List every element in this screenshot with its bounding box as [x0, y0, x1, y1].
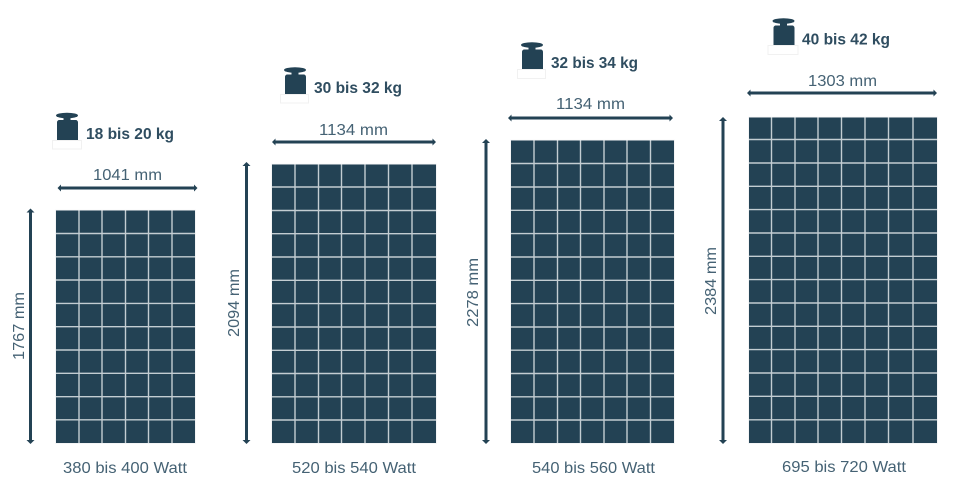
width label: 1303 mm [808, 73, 877, 90]
arrow: width [58, 184, 198, 192]
power label: 520 bis 540 Watt [292, 460, 417, 477]
power label: 380 bis 400 Watt [63, 460, 188, 477]
solar panel 6x10 [56, 210, 195, 443]
height label: 2384 mm [703, 247, 720, 315]
height label: 2094 mm [226, 269, 243, 337]
arrow: width [508, 114, 673, 122]
icon: weight 30 kg [280, 67, 308, 103]
module group: 540 bis 560 Watt [465, 42, 674, 477]
power label: 695 bis 720 Watt [782, 459, 907, 476]
solar panel 7x12 [272, 164, 436, 443]
arrow: width [272, 138, 436, 146]
height label: 2278 mm [465, 258, 482, 327]
width label: 1134 mm [319, 122, 388, 139]
height label: 1767 mm [11, 292, 28, 360]
weight label: 18 bis 20 kg [86, 126, 174, 143]
solar panel 7x13 [511, 140, 674, 443]
icon: weight 40 kg [768, 18, 798, 54]
arrow: width [747, 90, 937, 96]
arrow: height [719, 117, 727, 444]
width label: 1134 mm [556, 96, 625, 113]
icon: weight 18 kg [52, 113, 82, 149]
module group: 380 bis 400 Watt [11, 113, 198, 477]
power label: 540 bis 560 Watt [532, 460, 656, 477]
solar panel 8x14 [749, 118, 937, 443]
weight label: 30 bis 32 kg [314, 80, 402, 97]
module group: 520 bis 540 Watt [226, 67, 436, 477]
icon: weight 32 kg [518, 42, 546, 78]
arrow: height [482, 139, 490, 444]
width label: 1041 mm [93, 167, 162, 184]
arrow: height [242, 162, 250, 444]
weight label: 32 bis 34 kg [551, 55, 638, 72]
arrow: height [26, 208, 34, 444]
module group: 695 bis 720 Watt [703, 18, 937, 476]
weight label: 40 bis 42 kg [802, 32, 890, 48]
